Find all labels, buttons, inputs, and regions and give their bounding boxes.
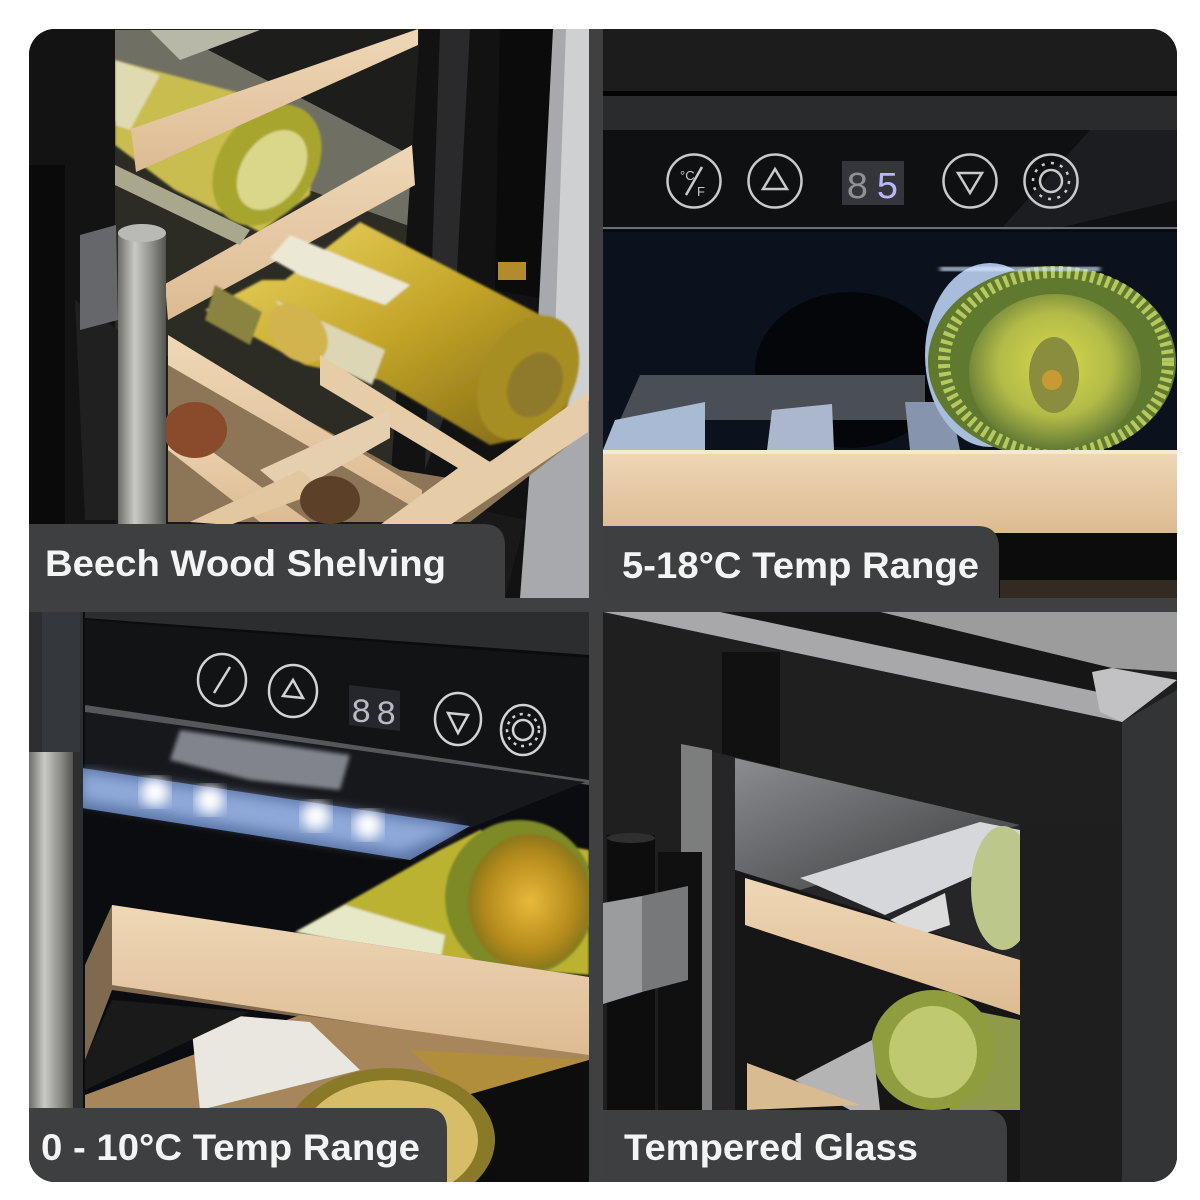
right door glass: [392, 34, 420, 470]
label: tempered glass: [603, 1110, 1007, 1182]
door handle: [80, 225, 118, 330]
label: 0-10 temp range: 0 - 10°C Temp Range: [41, 1126, 420, 1168]
icon label: fahrenheit: F: [697, 184, 705, 199]
wine bottle: [925, 263, 1176, 458]
panel: tempered glass: [603, 612, 1177, 1182]
label: beech wood shelving: [29, 524, 505, 598]
interior shelf slats: [603, 375, 960, 450]
wine bottle lower: [871, 990, 1020, 1110]
temperature display: 8: [351, 695, 371, 733]
wood shelf upper: [745, 878, 1020, 1015]
temperature display: 8: [376, 697, 396, 735]
control panel icons: [668, 154, 1078, 208]
door frame and handle: [29, 612, 83, 1182]
wine bottle upper: [295, 820, 595, 976]
label: 5-18 temp range: 5-18°C Temp Range: [622, 544, 979, 586]
control panel icons: [198, 654, 545, 755]
label: 5-18 temp range: [603, 526, 999, 598]
label: tempered glass: Tempered Glass: [624, 1126, 918, 1168]
label: 0-10 temp range: [29, 1108, 447, 1182]
wood shelf: [85, 905, 589, 1060]
icon label: unit switch: °C: [680, 168, 695, 183]
door handle bar: [603, 833, 702, 1110]
wooden shelf: [603, 450, 1177, 533]
panel: 5-18C temperature: [603, 29, 1177, 598]
lower shelf and bottle: [85, 1015, 589, 1108]
temperature display: [842, 161, 904, 205]
label: beech wood shelving: Beech Wood Shelving: [45, 542, 446, 584]
glass window: [681, 744, 1035, 1182]
temperature display: [349, 685, 400, 735]
panel: 0-10C temperature: [29, 612, 595, 1200]
shelf rails top: [131, 29, 418, 172]
LED light strip: [82, 768, 470, 860]
temperature display: 8: [846, 167, 869, 210]
wine bottle top: [971, 826, 1020, 950]
bottle main yellow: [205, 222, 600, 458]
door frame: [29, 29, 115, 328]
lower shelves: [168, 365, 570, 522]
panel: beech wood shelving: [29, 29, 600, 598]
bottle upper: [115, 59, 322, 232]
temperature display: 5: [876, 167, 899, 210]
